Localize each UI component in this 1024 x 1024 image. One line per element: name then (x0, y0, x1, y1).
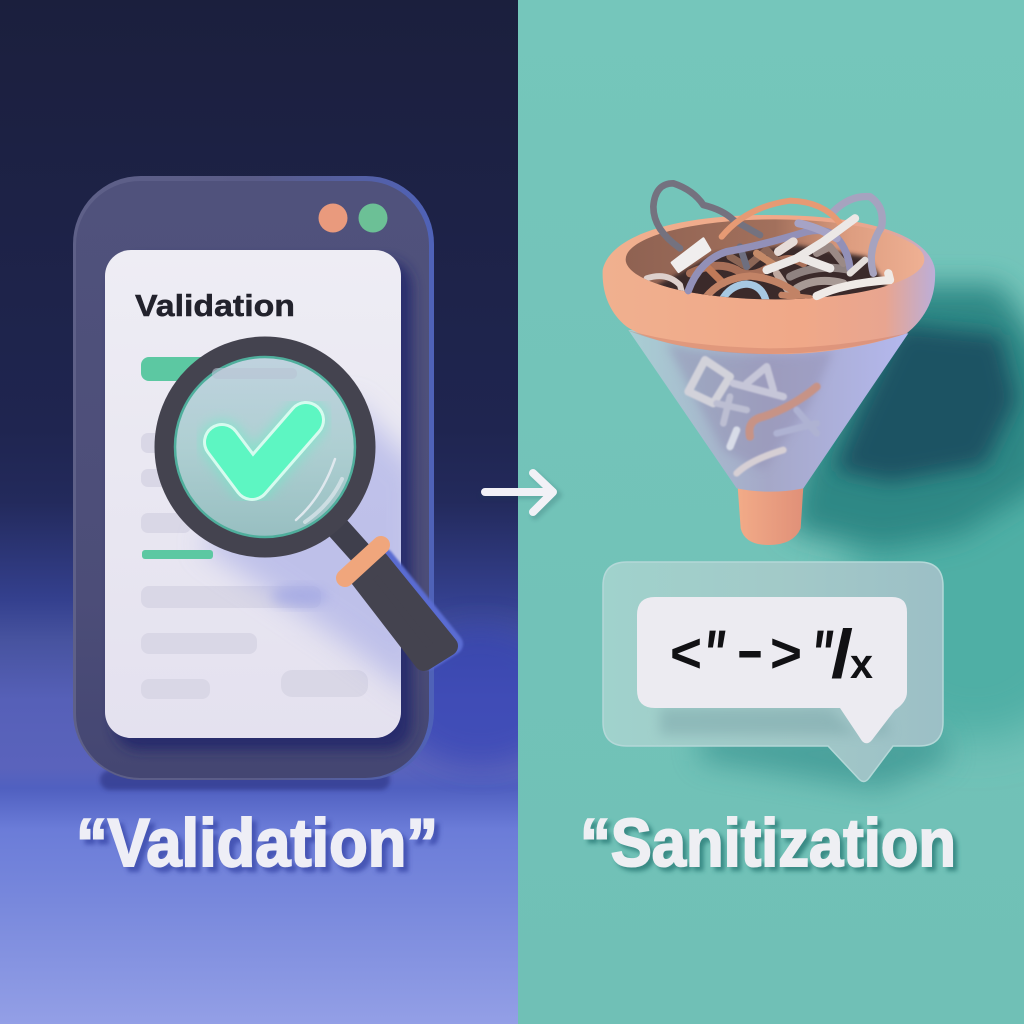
sanitized code sample: – (738, 612, 762, 686)
inner bubble (637, 597, 907, 743)
tangled strings in opening (647, 245, 887, 303)
sanitized code sample: " (811, 616, 834, 692)
icon: green window dot (358, 204, 388, 232)
title: sanitization: “Sanitization (584, 809, 960, 885)
check mark (222, 420, 306, 482)
panel: sanitization background (687, 270, 1024, 803)
green field bar (141, 357, 211, 381)
sanitized code sample: x (850, 640, 874, 687)
funnel cone (628, 330, 908, 492)
check glow (222, 420, 306, 482)
panel: glass speech bubble (603, 562, 943, 782)
panel: document page (105, 250, 420, 738)
panel: app window validation card (73, 176, 434, 790)
icon: magnifying glass with check mark (165, 347, 452, 661)
strings inside cone (667, 343, 833, 473)
magnifier cast shadow (200, 400, 420, 700)
panel: validation background (0, 0, 565, 1024)
funnel nozzle (738, 487, 803, 545)
sanitized code sample: < (670, 621, 702, 684)
document heading: Validation (135, 288, 295, 323)
funnel opening (626, 219, 924, 299)
handle (338, 528, 452, 661)
grey field bars (141, 433, 368, 699)
strings rising from the opening (653, 183, 890, 296)
title: validation: “Validation” (76, 805, 438, 881)
sanitized code sample (670, 612, 874, 692)
lens highlights (296, 459, 342, 522)
sanitized code sample: > (770, 621, 802, 684)
outer bubble (603, 562, 943, 782)
icon: orange window dot (318, 204, 348, 232)
title: sanitization: “Sanitization (580, 805, 956, 881)
window frame (73, 176, 434, 780)
sanitized code sample: / (831, 616, 853, 692)
funnel rim (603, 215, 935, 354)
arrow (484, 473, 558, 516)
icon: funnel with tangled strings (603, 183, 935, 545)
lens ghost bar (212, 368, 297, 379)
paper shadow (114, 260, 412, 750)
window ground shadow (100, 770, 390, 790)
green accent bar (142, 550, 213, 559)
sanitized code sample: " (703, 616, 726, 692)
title: validation: “Validation” (81, 810, 443, 886)
lens (165, 347, 365, 547)
